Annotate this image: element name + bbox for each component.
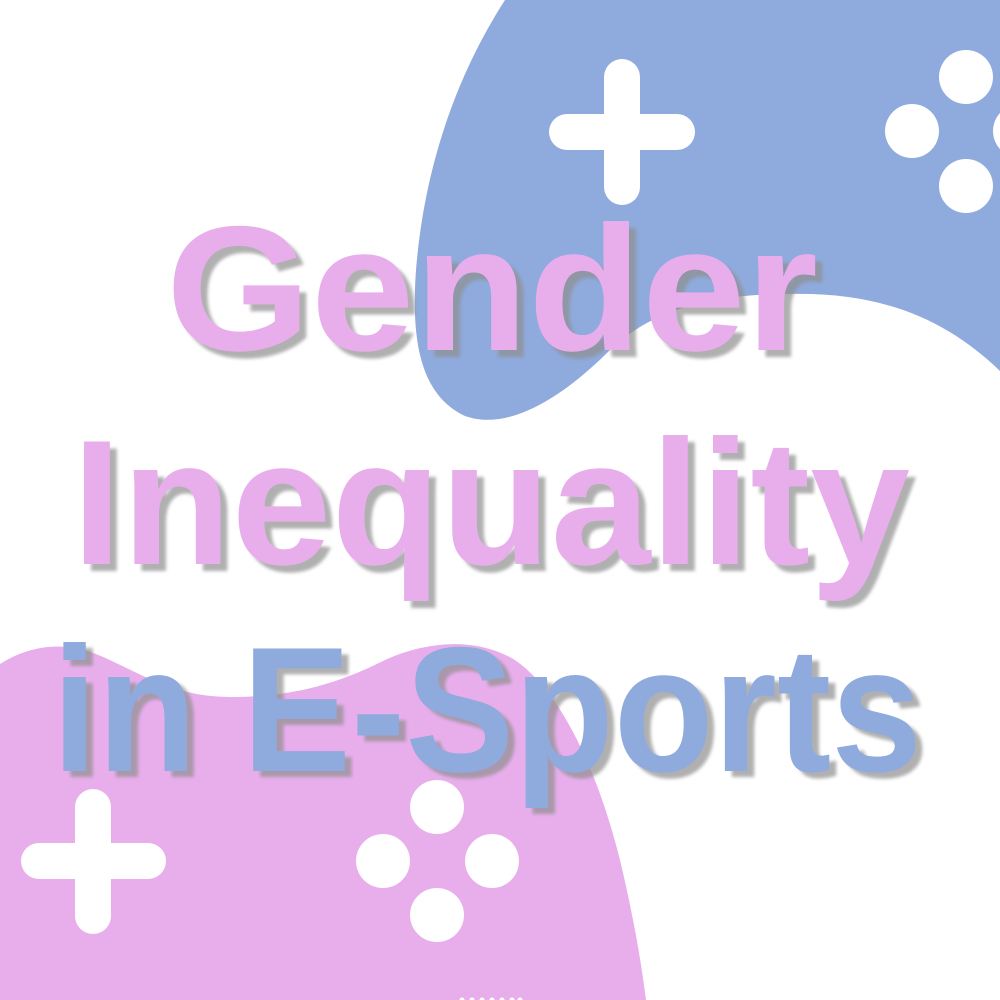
icon: pink controller d-pad (21, 789, 166, 934)
title line: Gender: Gender (166, 189, 818, 388)
icon: blue controller buttons (885, 50, 1000, 213)
title (52, 189, 929, 815)
pink game controller shape (0, 644, 646, 1000)
icon: pink controller buttons (356, 780, 519, 942)
blue game controller shape (415, 0, 1000, 420)
icon: blue controller d-pad (549, 59, 695, 205)
title line: in E-Sports: in E-Sports (59, 616, 929, 815)
small white dots at bottom edge (460, 998, 522, 1000)
title line: Gender: Gender (173, 196, 825, 395)
title line: Inequality: Inequality (72, 403, 910, 602)
title line: in E-Sports: in E-Sports (52, 610, 922, 809)
title line: Inequality: Inequality (79, 410, 917, 609)
